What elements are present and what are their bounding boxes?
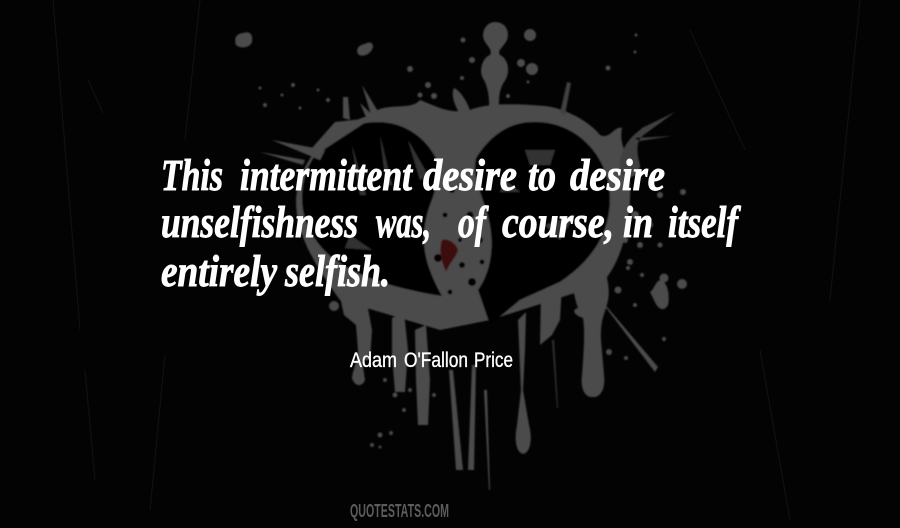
quote text: itself — [668, 198, 741, 247]
thin right drip — [552, 340, 558, 408]
quote text: was, — [376, 198, 431, 247]
blood stain — [440, 240, 458, 272]
lower left spatter dots — [329, 301, 436, 448]
quote text — [161, 151, 741, 296]
quote text: intermittent — [240, 151, 413, 200]
splash drops top — [235, 29, 637, 118]
quote text: to — [528, 151, 556, 200]
author: Price — [474, 349, 513, 372]
author: Adam — [350, 349, 397, 372]
heart splash body — [296, 100, 630, 330]
quote text: This — [161, 151, 223, 200]
big right drip — [573, 258, 609, 397]
heart black lobes — [302, 122, 610, 325]
dark spots in center — [409, 187, 484, 294]
quote text: selfish. — [284, 247, 390, 296]
watermark: QUOTESTATS.COM — [350, 501, 449, 521]
quote text: unselfishness — [161, 198, 358, 247]
splash rays right — [560, 82, 675, 177]
quote text: of — [458, 198, 489, 247]
lobe streaks — [345, 135, 575, 250]
author — [350, 349, 513, 372]
quote text: desire — [570, 151, 665, 200]
top column splash — [481, 22, 508, 116]
splatter illustration — [235, 22, 687, 490]
quote text: desire — [423, 151, 517, 200]
quote text: course, — [502, 198, 614, 247]
left and center drips — [340, 292, 490, 490]
quote text: in — [623, 198, 653, 247]
splash rays left — [260, 85, 382, 165]
right spatter dots — [606, 189, 687, 360]
middle right drips — [516, 285, 562, 454]
author: O'Fallon — [404, 349, 468, 372]
right blob and thin drip line — [604, 280, 669, 372]
quote text: entirely — [161, 247, 277, 296]
